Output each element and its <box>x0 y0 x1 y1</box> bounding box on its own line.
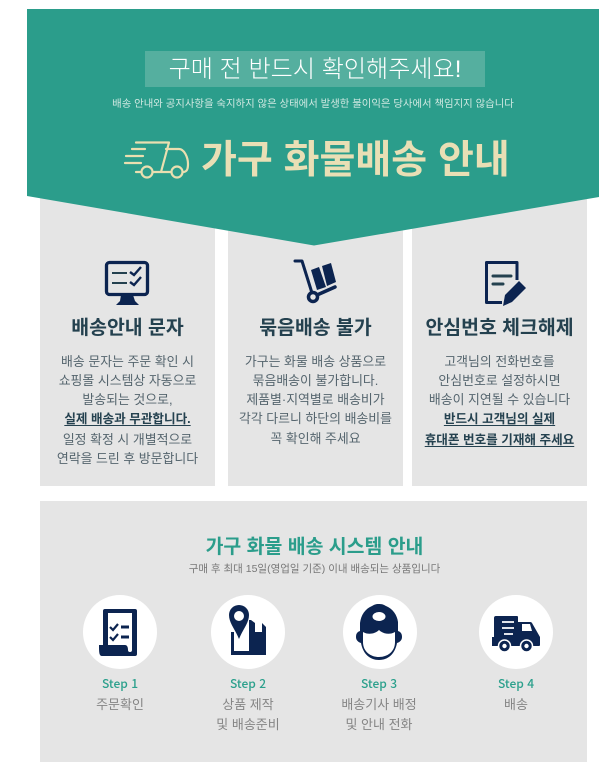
panel: safe number uncheck <box>412 190 587 486</box>
step label: Step 1 <box>102 675 138 692</box>
body text: 연락을 드린 후 방문합니다 <box>57 451 198 466</box>
step description <box>216 697 280 732</box>
body text: 실제 배송과 무관합니다. <box>64 412 191 426</box>
step label: Step 2 <box>230 675 266 692</box>
step description: 상품 제작 <box>222 697 274 712</box>
banner shape <box>27 9 599 246</box>
disclaimer text: 배송 안내와 공지사항을 숙지하지 않은 상태에서 발생한 불이익은 당사에서 책임지지 않습니다 <box>112 99 514 110</box>
body text: 쇼핑몰 시스템상 자동으로 <box>59 373 196 388</box>
step 4 <box>479 595 553 712</box>
icon: delivery driver with cap <box>343 595 417 669</box>
step description: 배송 <box>504 697 528 712</box>
body text: 제품별·지역별로 배송비가 <box>246 392 385 407</box>
callout: check before purchase: 구매 전 반드시 확인해주세요! <box>169 56 461 83</box>
heading: 묶음배송 불가 <box>259 317 372 339</box>
step 2 <box>211 595 285 732</box>
body text <box>239 354 392 446</box>
icon: hand truck with boxes <box>294 260 337 304</box>
step description: 및 안내 전화 <box>345 717 413 732</box>
icon: fast delivery truck <box>124 141 190 179</box>
body text: 묶음배송이 불가합니다. <box>253 373 378 388</box>
icon: monitor with checklist <box>104 260 150 305</box>
heading: 배송안내 문자 <box>71 317 184 339</box>
icon: document with pen <box>485 261 526 306</box>
body text: 꼭 확인해 주세요 <box>270 431 361 446</box>
body text: 반드시 고객님의 실제 <box>444 412 555 426</box>
body text: 배송 문자는 주문 확인 시 <box>61 354 194 368</box>
step description: 및 배송준비 <box>216 717 280 732</box>
body text: 휴대폰 번호를 기재해 주세요 <box>425 433 574 447</box>
body text: 일정 확정 시 개별적으로 <box>63 432 192 447</box>
step description <box>341 697 417 732</box>
step 3 <box>341 595 417 732</box>
body text: 각각 다르니 하단의 배송비를 <box>239 411 392 426</box>
step label: Step 4 <box>498 675 534 692</box>
panel: delivery system <box>40 501 587 762</box>
body text <box>424 354 574 447</box>
body text: 가구는 화물 배송 상품으로 <box>245 354 386 368</box>
icon: delivery truck <box>479 595 553 669</box>
top banner <box>27 9 599 246</box>
step 1 <box>83 595 157 712</box>
panel: shipping text notice <box>40 190 215 486</box>
section heading: 가구 화물 배송 시스템 안내 <box>206 536 423 558</box>
title: 가구 화물배송 안내 <box>201 139 510 182</box>
body text: 배송이 지연될 수 있습니다 <box>429 392 570 407</box>
body text: 안심번호로 설정하시면 <box>438 373 561 388</box>
callout: check before purchase <box>145 51 485 87</box>
body text: 발송되는 것으로, <box>82 392 173 407</box>
body text: 고객님의 전화번호를 <box>444 354 555 368</box>
icon: order checklist <box>83 595 157 669</box>
step label: Step 3 <box>361 675 397 692</box>
section subtitle: 구매 후 최대 15일(영업일 기준) 이내 배송되는 상품입니다 <box>189 563 440 575</box>
body text <box>57 354 198 466</box>
step description: 주문확인 <box>96 697 144 712</box>
icon: location pin and factory <box>211 595 285 669</box>
panel: no combined shipping <box>228 190 403 486</box>
heading: 안심번호 체크해제 <box>425 317 574 339</box>
step description: 배송기사 배정 <box>341 697 417 712</box>
